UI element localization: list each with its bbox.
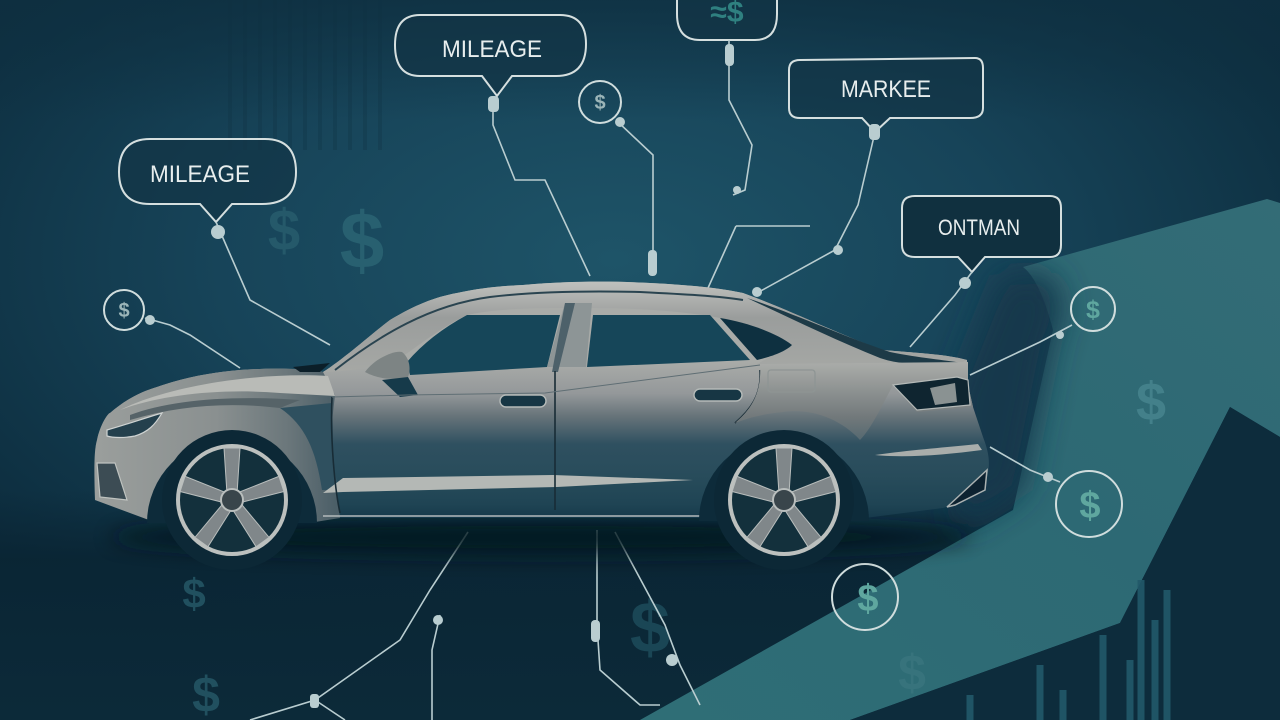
- tail light: [893, 377, 970, 410]
- callout: mileage top: [395, 15, 586, 96]
- fuel flap: [768, 370, 815, 392]
- rear diffuser: [947, 470, 987, 507]
- ground shadow: [110, 519, 970, 555]
- callout: mileage left: [119, 139, 296, 222]
- small bar chart: [970, 580, 1167, 720]
- door sill highlight: [323, 475, 693, 493]
- dollar circle labels: [118, 92, 1101, 620]
- rear wheel: [699, 430, 869, 570]
- spoiler dark stripe: [747, 298, 962, 365]
- rear wheel arch: [699, 436, 869, 521]
- callout: market: [789, 58, 983, 132]
- rear window: [587, 315, 750, 367]
- dollar circle labels: $: [1086, 296, 1100, 324]
- dollar circle labels: $: [1079, 485, 1101, 527]
- callout: condition: ONTMAN: [938, 215, 1020, 240]
- rear quarter panel: [735, 362, 973, 440]
- B pillar: [547, 303, 592, 367]
- dollar watermarks: $: [268, 198, 300, 263]
- roof dark lines: [335, 292, 743, 370]
- car: [94, 282, 989, 570]
- callout: market: MARKEE: [841, 76, 931, 103]
- belt line: [332, 365, 760, 397]
- callout: mileage top: MILEAGE: [442, 36, 542, 63]
- mirror: [365, 352, 410, 379]
- dollar circle labels: $: [857, 578, 879, 620]
- rising arrow shape: [640, 199, 1280, 720]
- car body: [94, 282, 989, 523]
- front fender panel: [94, 369, 340, 523]
- front window: [407, 315, 560, 375]
- decorative vertical stripes: [230, 0, 380, 150]
- front wheel: [147, 430, 317, 570]
- quarter window: [720, 318, 792, 360]
- dollar watermarks: $: [182, 570, 206, 617]
- callout: top partial icon bubble: [677, 0, 777, 40]
- dollar circle icons: [104, 81, 1122, 630]
- headlight: [107, 413, 162, 438]
- dollar watermarks: $: [340, 196, 384, 285]
- lower sill line: [323, 515, 700, 517]
- dollar watermarks: $: [1136, 372, 1166, 432]
- dollar watermarks: $: [898, 645, 926, 701]
- dollar circle labels: $: [118, 300, 130, 322]
- callout: mileage left: MILEAGE: [150, 161, 250, 188]
- rear bumper highlight: [875, 444, 982, 456]
- front grille: [97, 463, 127, 500]
- connector nodes: [145, 44, 1064, 708]
- callout: condition: [902, 196, 1061, 272]
- lower right dark area: [850, 407, 1280, 720]
- connector lines: [145, 40, 1072, 720]
- dollar circle labels: $: [594, 92, 606, 114]
- dollar watermarks: [182, 196, 1166, 720]
- fender dark inset: [280, 403, 340, 490]
- front wheel arch: [147, 438, 317, 523]
- dollar watermarks: $: [630, 588, 670, 668]
- door lines: [332, 370, 760, 513]
- roof silver band: [323, 282, 967, 372]
- hood scoop: [293, 363, 330, 372]
- hood highlights: [120, 375, 335, 410]
- door handles: [500, 395, 546, 407]
